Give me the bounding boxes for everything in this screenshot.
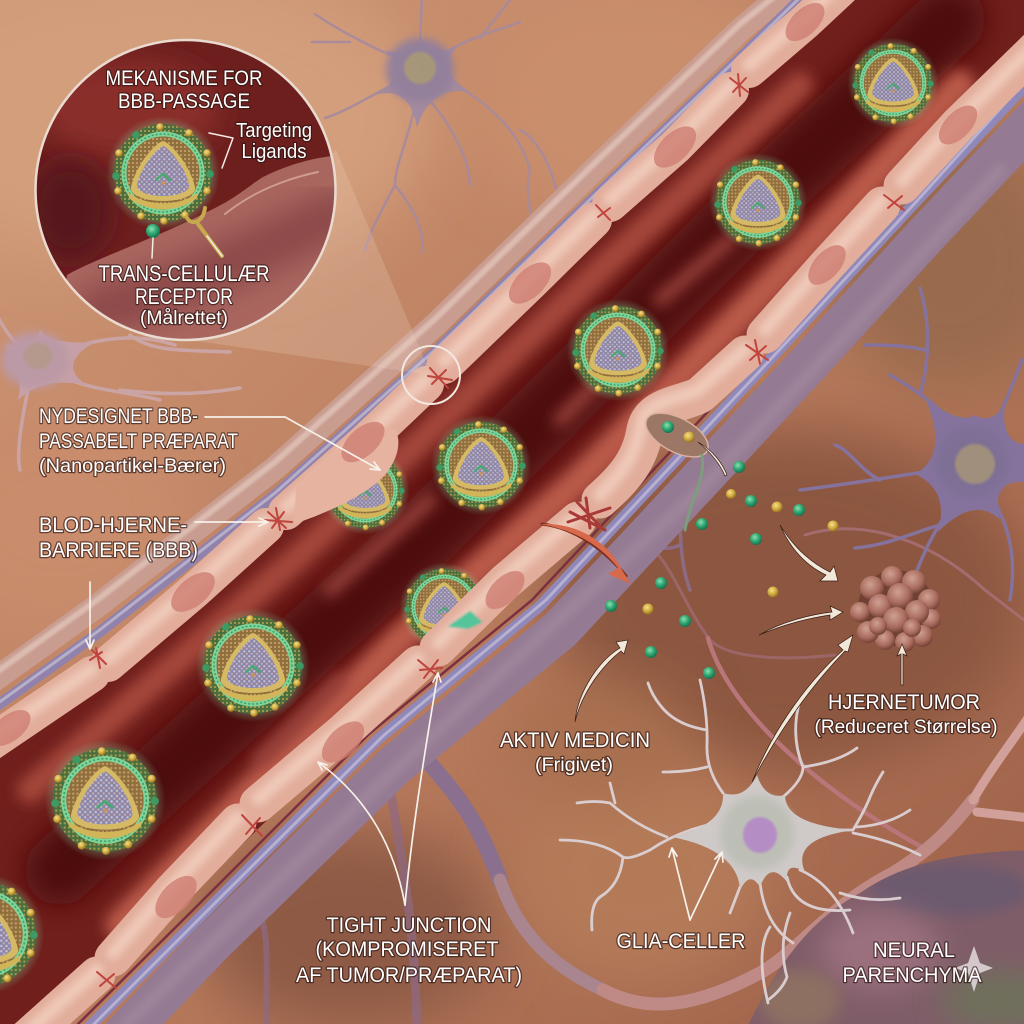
label: targeting ligands: Ligands: [242, 141, 306, 163]
tight junctions: [90, 74, 904, 988]
red arrow through compromised tight junction: [540, 524, 631, 584]
inset: BBB passage mechanism: [30, 40, 345, 345]
label: neural parenchyma: [842, 939, 982, 987]
label: brain tumor: [814, 691, 998, 738]
label: tight junction: TIGHT JUNCTION: [326, 914, 492, 937]
label: active medicine: AKTIV MEDICIN: [500, 729, 650, 752]
label: tight junction: (KOMPROMISERET: [316, 938, 499, 961]
label: neural parenchyma: NEURAL: [873, 939, 955, 962]
neuron: top astrocyte: [312, 0, 558, 252]
label: targeting ligands: Targeting: [236, 120, 312, 142]
inset leader lines: [152, 133, 233, 258]
label: glia cells: GLIA-CELLER: [616, 930, 746, 953]
callout wedge connecting lens to junction: [155, 150, 431, 375]
white arrows toward tumor and drug: [575, 442, 907, 782]
label: blood-brain barrier: [39, 514, 198, 562]
label: tight junction: AF TUMOR/PRÆPARAT): [296, 964, 522, 987]
neuron: glia cell: [560, 680, 920, 1003]
label: blood-brain barrier: BLOD-HJERNE-: [39, 514, 187, 537]
label: brain tumor: HJERNETUMOR: [828, 691, 980, 714]
label: redesigned BBB-permeable drug: PASSABELT PRÆPARAT: [39, 430, 238, 453]
label: targeting ligands: [236, 120, 312, 163]
upper cell bulge covering nanoparticle: [294, 424, 398, 524]
inset title: [106, 67, 262, 113]
nanoparticle merging into the wall: [450, 612, 481, 628]
inset title: MEKANISME FOR: [106, 67, 262, 90]
inset nanoparticle: [106, 116, 220, 230]
sparkle: [955, 946, 993, 992]
released active drug particles: [605, 421, 838, 679]
vesicle: bulge releasing medicine through the wall: [639, 404, 715, 530]
thin capillary branches in the parenchyma: [255, 470, 1024, 1024]
label: neural parenchyma: PARENCHYMA: [842, 964, 982, 987]
label: active medicine: (Frigivet): [535, 755, 613, 776]
label: brain tumor: (Reduceret Størrelse): [814, 717, 998, 738]
neural parenchyma mass: [744, 850, 1024, 1024]
lens circle on tight junction: [402, 346, 460, 404]
tumor: [850, 566, 941, 652]
neuron: left astrocyte: [0, 312, 240, 470]
inset receptor: [187, 208, 222, 256]
label: trans-cellular receptor: [98, 261, 270, 329]
label: active medicine: [500, 729, 650, 776]
label: redesigned BBB-permeable drug: [39, 405, 238, 477]
label: trans-cellular receptor: TRANS-CELLULÆR: [98, 261, 270, 286]
label: trans-cellular receptor: RECEPTOR: [135, 284, 233, 309]
label: redesigned BBB-permeable drug: NYDESIGNET BBB-: [39, 405, 198, 428]
endothelial cells: upper wall: [0, 0, 850, 750]
label: tight junction: [296, 914, 522, 987]
long process below the vessel: [415, 715, 1024, 1004]
neuron: right astrocyte: [800, 288, 1024, 600]
label: redesigned BBB-permeable drug: (Nanopartikel-Bærer): [39, 455, 226, 477]
leader arrows for left and bottom labels: [86, 417, 723, 920]
inset title: BBB-PASSAGE: [118, 90, 250, 113]
inset green receptor ligand: [146, 224, 160, 238]
label: trans-cellular receptor: (Målrettet): [140, 308, 228, 329]
label: blood-brain barrier: BARRIERE (BBB): [39, 539, 198, 562]
vessel wall: upper outer layer and membrane: [0, 0, 820, 718]
